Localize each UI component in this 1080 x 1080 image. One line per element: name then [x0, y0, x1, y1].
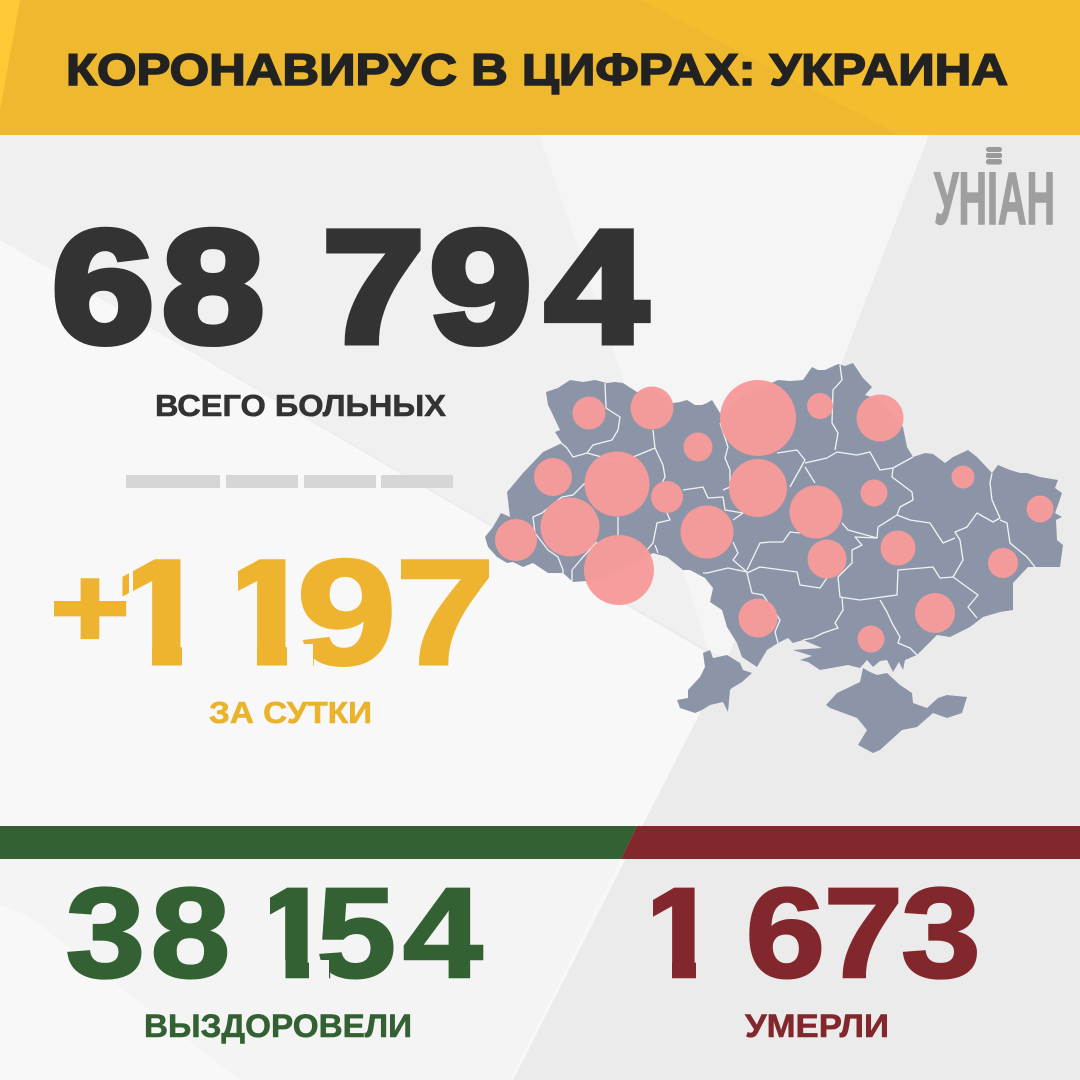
- title: КОРОНАВИРУС В ЦИФРАХ: УКРАИНА: [66, 46, 1008, 95]
- total cases label: ВСЕГО БОЛЬНЫХ: [155, 388, 446, 423]
- map of Ukraine: [485, 363, 1063, 753]
- mainland: [485, 363, 1063, 672]
- bottom band: deaths: [621, 826, 1080, 859]
- daily increase number: 1 197: [112, 529, 495, 697]
- daily increase number: [54, 558, 490, 667]
- Crimea: [826, 668, 967, 753]
- daily increase number: +: [50, 543, 130, 671]
- deaths number: 1 673: [640, 861, 981, 1004]
- Odesa south: [677, 650, 752, 713]
- header band: [0, 0, 1080, 135]
- total cases number: 68 794: [52, 197, 648, 376]
- bottom band: recovered: [0, 826, 637, 859]
- recovered label: ВЫЗДОРОВЕЛИ: [144, 1008, 412, 1044]
- recovered number: 38 154: [66, 861, 483, 1004]
- deaths label: УМЕРЛИ: [745, 1008, 889, 1044]
- logo: UNIAN: [934, 147, 1055, 240]
- daily increase label: ЗА СУТКИ: [209, 695, 372, 730]
- logo icon: [986, 147, 1002, 164]
- Case circles: [495, 380, 1054, 652]
- divider dashes: [126, 475, 453, 488]
- Region borders: [533, 365, 1035, 655]
